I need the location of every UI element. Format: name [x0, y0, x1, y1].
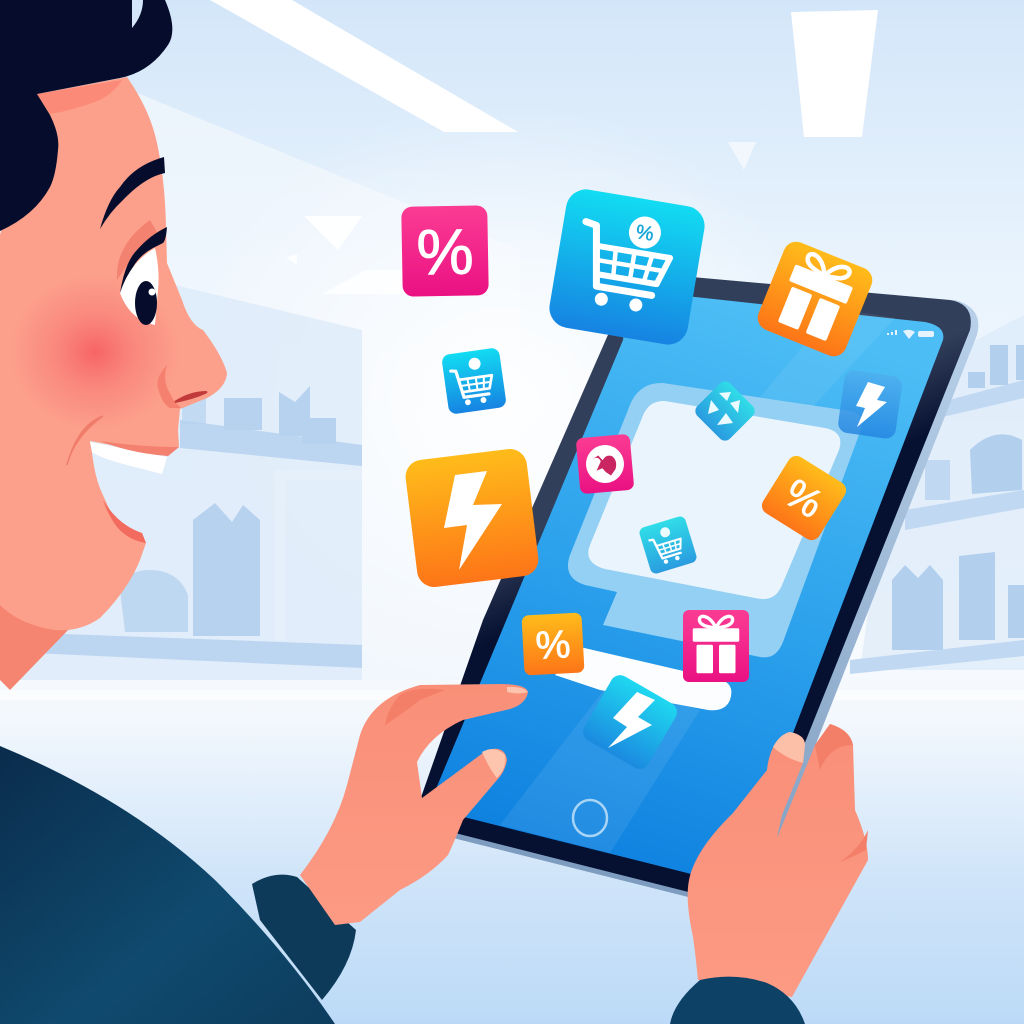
- screen: [428, 291, 943, 885]
- teeth: [90, 442, 167, 474]
- smile line: [67, 416, 103, 465]
- right hand: [688, 724, 868, 997]
- thumbnail: [773, 732, 805, 763]
- white card on screen: [588, 401, 840, 599]
- icon: pink percent: [401, 205, 489, 297]
- face: [0, 77, 227, 630]
- right sleeve: [670, 977, 805, 1024]
- eyebrow: [100, 157, 165, 229]
- icon: pink gift: [683, 610, 749, 682]
- screen reflections: [500, 682, 700, 853]
- finger shading: [815, 724, 853, 770]
- neck: [0, 590, 70, 690]
- white pill on screen: [555, 647, 731, 710]
- icon: pink flower badge: [576, 434, 634, 494]
- cheek blush: [10, 274, 180, 430]
- icon: orange percent: [759, 453, 849, 543]
- icon: teal diamond: [692, 378, 758, 444]
- chat bubble frame on screen: [568, 383, 862, 657]
- icon: orange gift: [754, 238, 876, 360]
- left hand: [300, 684, 528, 925]
- icon: large shopping cart: %: [634, 221, 656, 246]
- forehead shadow: [37, 80, 122, 114]
- tablet metal edge: [445, 300, 978, 910]
- icon: large orange lightning: [404, 447, 540, 589]
- home button: [573, 800, 607, 836]
- icon: orange percent: %: [777, 471, 830, 527]
- icon: pink percent: %: [416, 216, 474, 288]
- nose wing: [157, 365, 181, 408]
- shelf products: [120, 386, 336, 636]
- icon: bottom percent: [521, 612, 585, 676]
- lower lip: [103, 500, 146, 543]
- tablet body: [418, 272, 971, 905]
- person: shoulder and coat: [0, 746, 356, 1024]
- on-screen icons: [521, 369, 903, 773]
- nostril: [175, 392, 207, 402]
- person: head and face: [0, 0, 227, 690]
- icon: large shopping cart: [546, 186, 708, 348]
- right shelves: [850, 315, 1024, 674]
- status bar: [887, 330, 934, 339]
- left shelves: [0, 285, 362, 680]
- eye: [120, 227, 167, 325]
- icon: lightning on screen top right: [837, 369, 903, 440]
- icon: small cart: [441, 347, 507, 415]
- palm crease: [840, 830, 868, 862]
- index fingernail: [507, 687, 528, 694]
- icon: small cart on screen: [638, 515, 698, 575]
- icon: lightning on screen bottom: [579, 671, 681, 773]
- eyelid: [117, 220, 157, 280]
- floating icons: [401, 186, 876, 589]
- tablet: [418, 272, 978, 910]
- finger shading: [385, 689, 445, 725]
- hair: [0, 0, 172, 231]
- ceiling lights: [210, 0, 878, 294]
- icon: bottom percent: %: [535, 623, 572, 668]
- thumbnail: [482, 749, 505, 778]
- upper lip: [100, 441, 179, 456]
